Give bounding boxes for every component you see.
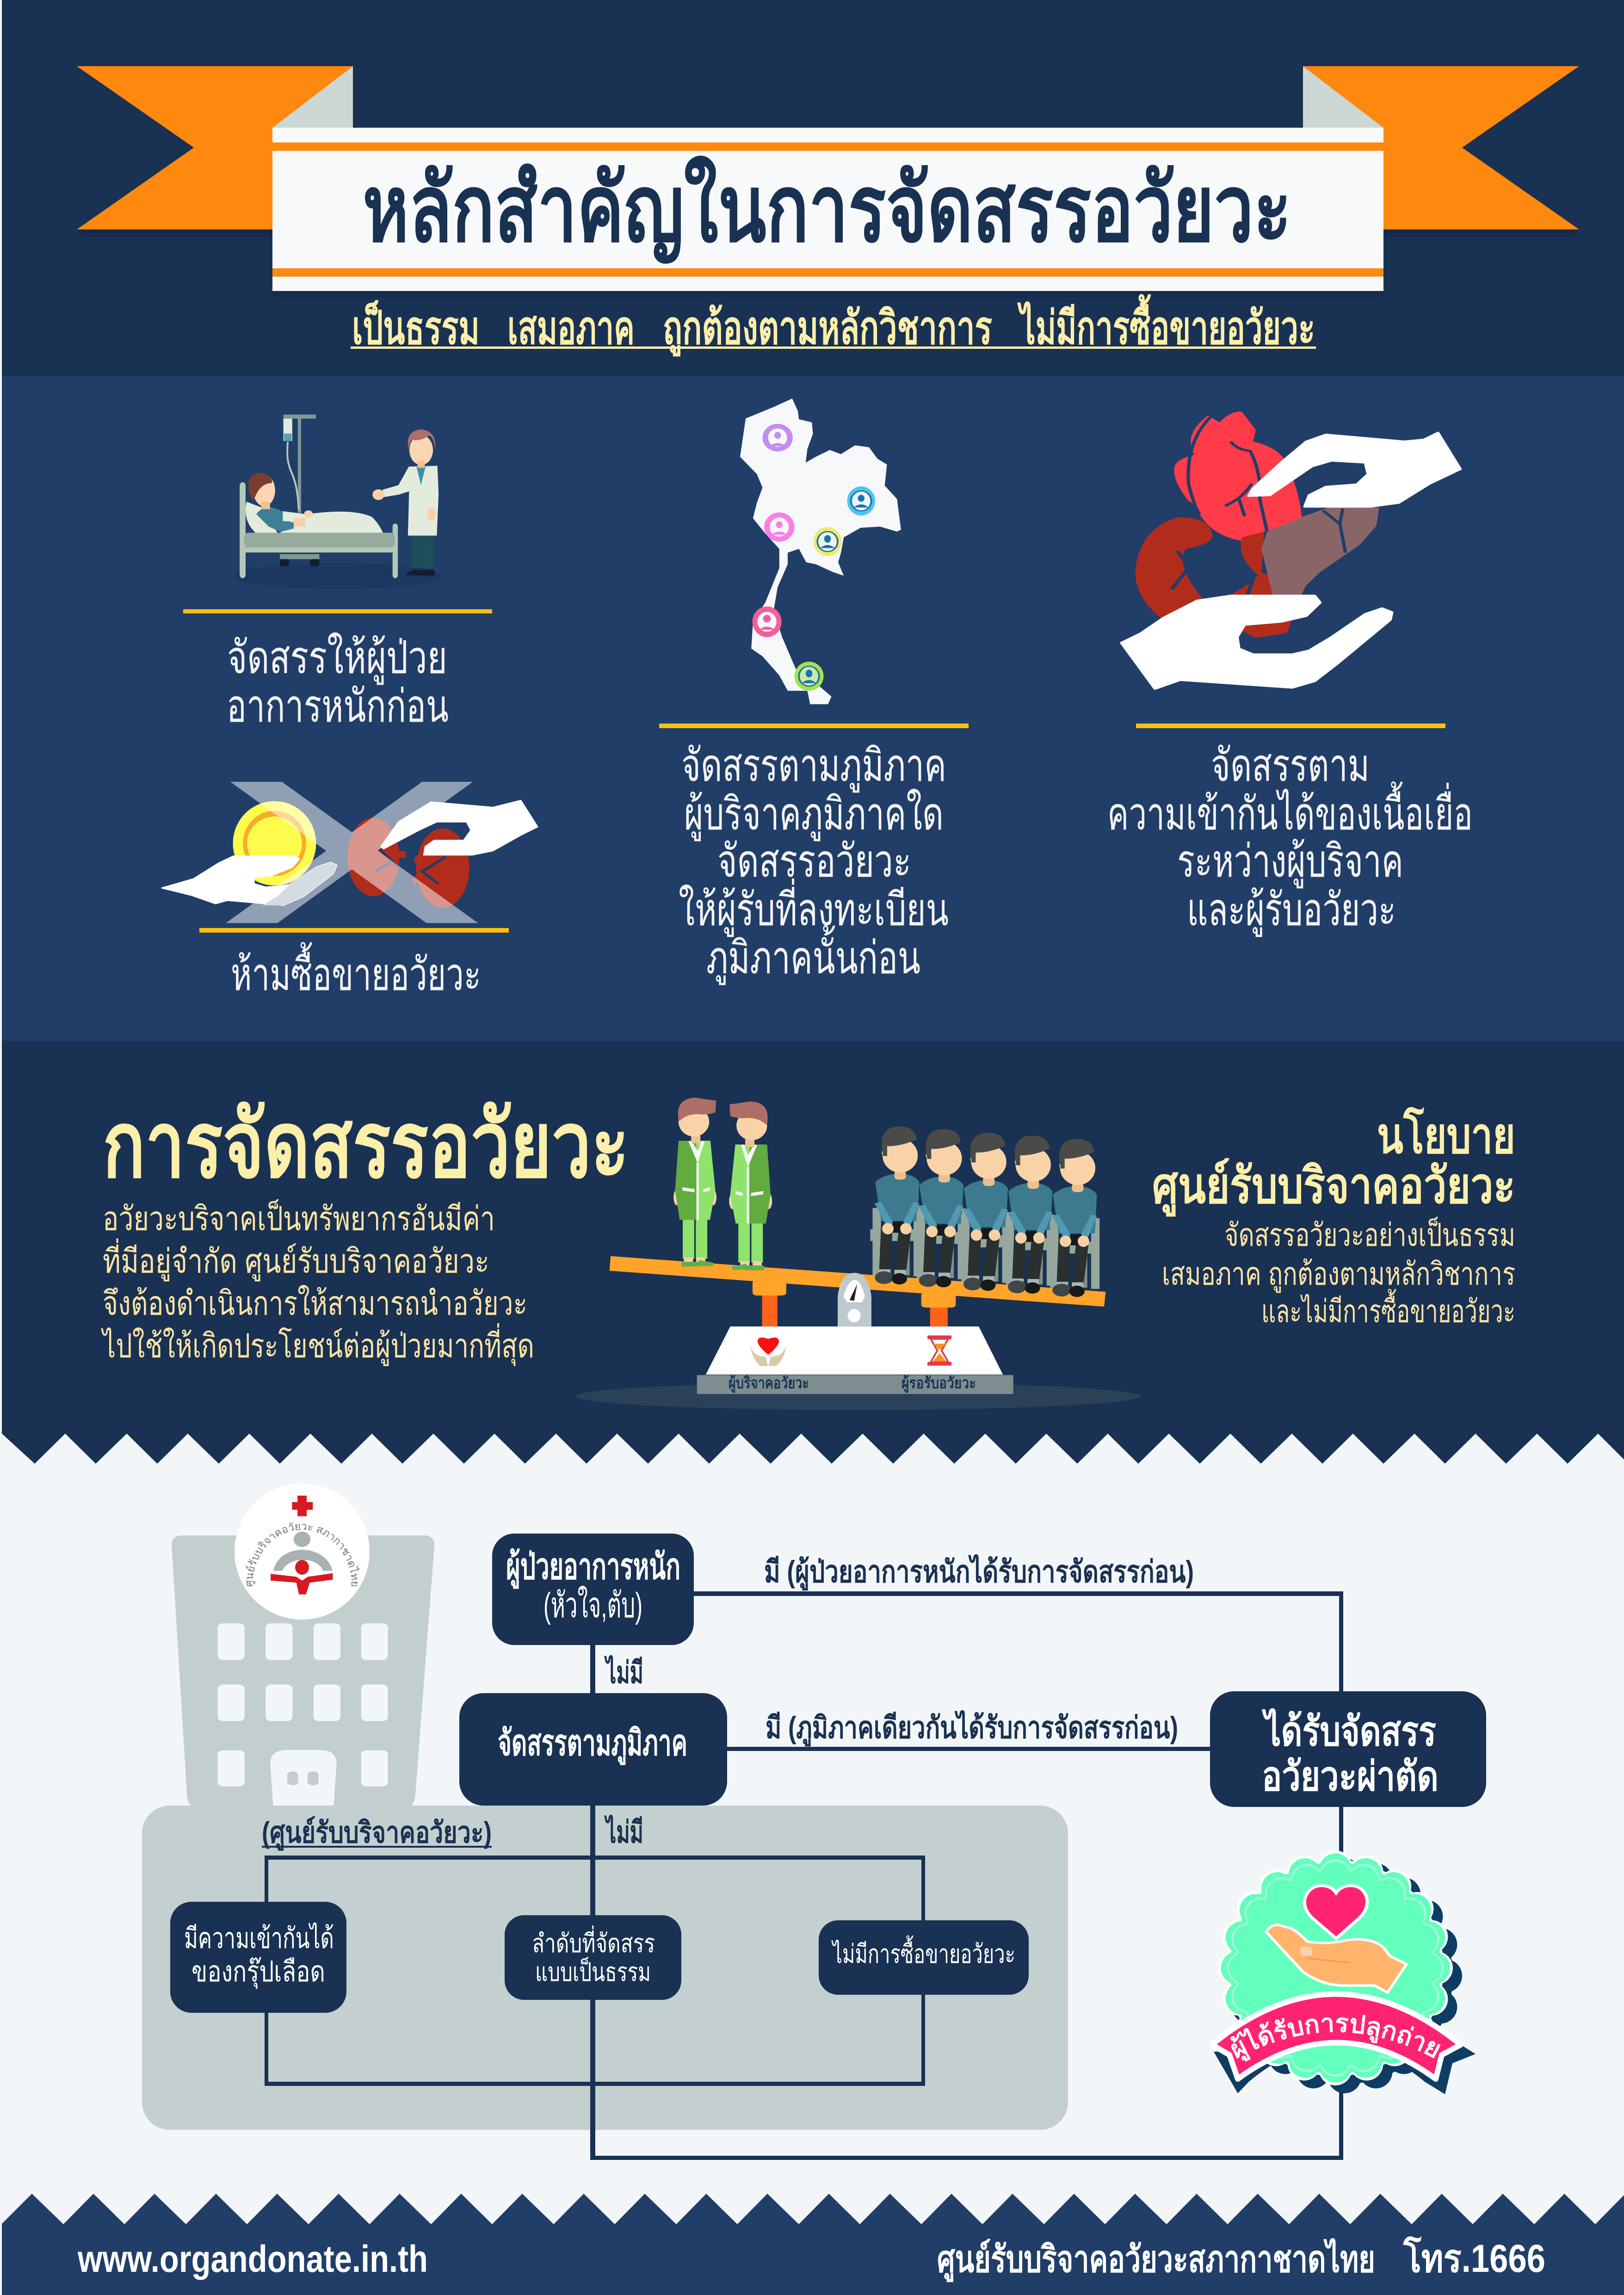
text: allocate to severe patients first: อาการหนักก่อน [227,680,449,731]
scale label: donors: ผู้บริจาคอวัยวะ [729,1374,809,1393]
scale shadow [575,1383,1141,1410]
title: หลักสำคัญในการจัดสรรอวัยวะ [363,155,1291,264]
heading: policy [1152,1107,1515,1217]
background: header band [0,0,1624,376]
label: yes severe patients first: มี (ผู้ป่วยอาการหนักได้รับการจัดสรรก่อน) [764,1554,1194,1591]
flow box: fair allocation order: แบบเป็นธรรม [535,1956,651,1986]
text: allocation explanation: จึงต้องดำเนินการให้สามารถนำอวัยวะ [103,1285,527,1322]
subtitle: principles [351,294,1316,357]
icon: donor heart in hands [751,1337,786,1366]
divider line: compatibility [1136,724,1445,728]
ribbon text: ผู้ได้รับการปลูกถ่าย [1225,2009,1446,2066]
text: allocate to severe patients first: จัดสรรให้ผู้ป่วย [227,632,447,685]
ribbon left tail [77,66,353,229]
footer: website: www.organdonate.in.th [77,2238,428,2280]
subtitle: principles: ถูกต้องตามหลักวิชาการ [663,302,992,357]
icon: heart [1304,1886,1367,1938]
flow box: severe patients: (หัวใจ,ตับ) [543,1585,642,1625]
grey platform: donation centre [142,1806,1068,2130]
pin: blue [847,486,875,515]
pin: green [795,662,824,691]
flow box: receive organ transplant [1210,1691,1486,1807]
text: allocate to severe patients first [227,632,449,731]
text: policy explanation: และไม่มีการซื้อขายอวัยวะ [1261,1289,1515,1329]
icon: hospital building [172,1535,434,1808]
flow box: blood group compatibility: มีความเข้ากันได้ [184,1922,334,1955]
text: allocation explanation: ที่มีอยู่จำกัด ศูนย์รับบริจาคอวัยวะ [103,1238,489,1281]
flow box: blood group compatibility: ของกรุ๊ปเลือด [191,1956,325,1989]
text: allocate by region: ผู้บริจาคภูมิภาคใด [684,788,944,841]
label: yes same region first: มี (ภูมิภาคเดียวกันได้รับการจัดสรรก่อน) [766,1710,1178,1747]
heading: organ allocation: การจัดสรรอวัยวะ [103,1094,629,1197]
flow box: severe patients [492,1534,694,1645]
seated patients [870,1126,1099,1297]
ribbon orange band bottom [272,268,1383,277]
ribbon white panel [272,128,1383,291]
icon: hands holding organs [1121,412,1460,689]
logo: organ donation centre [235,1484,370,1620]
flow box: severe patients: ผู้ป่วยอาการหนัก [506,1546,680,1589]
subtitle: principles: ไม่มีการซื้อขายอวัยวะ [1017,294,1315,354]
scale beam [610,1256,1105,1306]
text: allocation explanation: ไปใช้ให้เกิดประโยชน์ต่อผู้ป่วยมากที่สุด [101,1323,534,1366]
flow box: fair allocation order [505,1915,681,2000]
flow box: receive organ transplant: อวัยวะผ่าตัด [1262,1753,1439,1799]
label: donation centre: (ศูนย์รับบริจาคอวัยวะ) [262,1816,492,1851]
subtitle: principles: เสมอภาค [507,302,635,354]
text: allocation explanation [101,1199,534,1366]
label: none 2: ไม่มี [604,1814,643,1849]
icon: patient in bed with doctor [233,414,443,589]
flow box: no organ trading: ไม่มีการซื้อขายอวัยวะ [831,1936,1015,1968]
divider line: no trading [199,928,509,933]
flow box: receive organ transplant: ได้รับจัดสรร [1262,1708,1436,1754]
illustration: donors versus waiting patients scale [575,1098,1141,1410]
footer: telephone: โทร.1666 [1403,2236,1545,2280]
pin: yellow [814,527,841,556]
divider line: region [659,724,969,728]
background: flowchart area with zigzag top [0,1434,1624,2227]
text: allocate by tissue compatibility [1107,740,1473,937]
scale posts [762,1294,948,1326]
scale label bar [697,1375,1013,1394]
doctors (donors) [673,1098,772,1270]
text: do not trade organs: ห้ามซื้อขายอวัยวะ [231,942,481,1000]
heading: policy: นโยบาย [1377,1107,1515,1163]
badge: transplant recipient [1212,1850,1476,2094]
text: allocate by tissue compatibility: ความเข้ากันได้ของเนื้อเยื่อ [1107,781,1473,839]
pin: hot pink [753,606,782,637]
text: allocate by tissue compatibility: ระหว่างผู้บริจาค [1177,835,1403,889]
flow box: blood group compatibility [170,1902,346,2013]
flow box: allocate by region: จัดสรรตามภูมิภาค [498,1722,687,1765]
text: allocate by region: จัดสรรตามภูมิภาค [681,740,946,793]
background: allocation band [0,1041,1624,1457]
flow box: allocate by region [459,1693,727,1806]
scale label: waiting recipients: ผู้รอรับอวัยวะ [902,1374,976,1393]
text: allocate by tissue compatibility: และผู้รับอวัยวะ [1187,884,1396,937]
flow box: fair allocation order: ลำดับที่จัดสรร [532,1925,655,1958]
label: none 1: ไม่มี [604,1655,643,1689]
icon: no organ trading [162,782,538,923]
text: allocate by region: ให้ผู้รับที่ลงทะเบียน [679,878,949,937]
icon: Thailand map with pins [740,399,901,704]
text: allocate by tissue compatibility: จัดสรรตาม [1211,740,1370,791]
ribbon left fold [272,66,353,128]
text: policy explanation: เสมอภาค ถูกต้องตามหลักวิชาการ [1162,1256,1515,1293]
icon: open hand [1266,1925,1407,1992]
divider line: patient [183,609,492,613]
pin: pink [764,513,795,542]
heading: policy: ศูนย์รับบริจาคอวัยวะ [1152,1157,1515,1217]
footer: organisation name: ศูนย์รับบริจาคอวัยวะสภากาชาดไทย [937,2238,1375,2283]
flow connector lines [265,1591,1343,2160]
pin: purple [762,424,793,452]
text: policy explanation: จัดสรรอวัยวะอย่างเป็นธรรม [1224,1217,1515,1253]
icon: hourglass [927,1336,951,1366]
text: allocate by region: จัดสรรอวัยวะ [717,835,911,886]
subtitle: principles: เป็นธรรม [352,300,480,354]
background: footer band with zigzag [0,2194,1624,2295]
background: principles panel [0,376,1624,1041]
text: allocation explanation: อวัยวะบริจาคเป็นทรัพยากรอันมีค่า [103,1199,495,1237]
gauge [838,1273,871,1326]
text: policy explanation [1162,1217,1515,1329]
ribbon right tail [1303,66,1579,229]
scale base [706,1326,1003,1374]
ribbon right fold [1303,66,1383,128]
ribbon banner [1212,1994,1461,2079]
ribbon banner [77,66,1579,297]
flow box: no organ trading [819,1920,1029,1995]
ribbon orange band top [272,142,1383,151]
text: allocate by region [679,740,949,985]
text: allocate by region: ภูมิภาคนั้นก่อน [706,925,920,985]
logo: organ donation centre: ศูนย์รับบริจาคอวัยวะ สภากาชาดไทย [243,1520,361,1587]
